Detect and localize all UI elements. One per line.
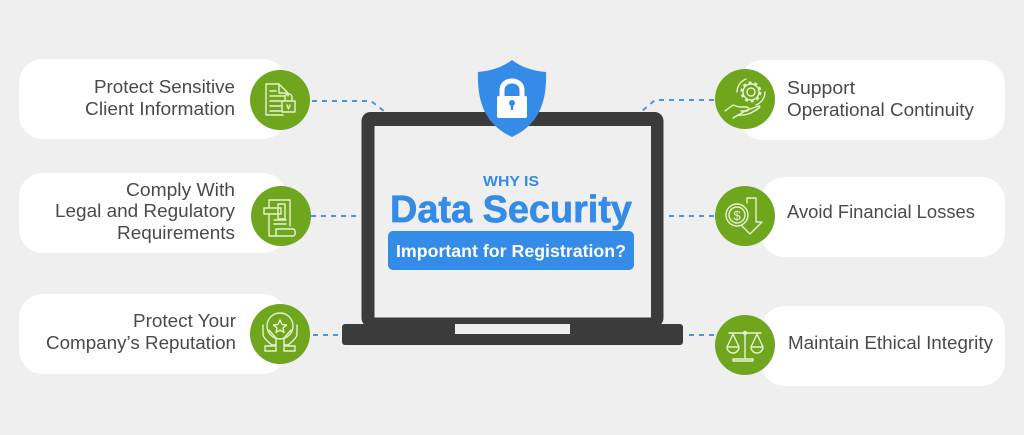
icon: balance scales bbox=[715, 315, 775, 375]
connector: bottom left bbox=[313, 334, 341, 336]
panel: comply with legal: Requirements bbox=[117, 223, 235, 243]
icon: shield with padlock bbox=[478, 60, 546, 137]
heading banner bbox=[388, 231, 634, 270]
heading: data security: Data Security bbox=[390, 189, 632, 231]
connector: top left bbox=[312, 101, 384, 111]
connector: middle right bbox=[664, 215, 714, 217]
panel: protect sensitive client information bbox=[19, 59, 287, 139]
panel: support operational continuity: Operational Continuity bbox=[787, 100, 974, 120]
laptop bbox=[342, 112, 683, 345]
icon: hand with gear bbox=[715, 69, 775, 129]
heading banner: Important for Registration? bbox=[396, 241, 626, 261]
icon: dollar coin with down arrow bbox=[715, 186, 775, 246]
panel: maintain ethical integrity bbox=[761, 306, 1005, 386]
icon: dollar coin with down arrow: $ bbox=[733, 208, 741, 223]
panel: protect sensitive client information: Client Information bbox=[85, 99, 235, 119]
panel: comply with legal: Comply With bbox=[126, 180, 235, 200]
icon: legal scroll with gavel bbox=[251, 186, 311, 246]
panel: comply with legal: Legal and Regulatory bbox=[55, 201, 235, 221]
panel: protect reputation bbox=[19, 294, 287, 374]
heading bbox=[388, 174, 634, 270]
panel: support operational continuity: Support bbox=[787, 78, 855, 98]
connector: middle left bbox=[311, 215, 361, 217]
panel: support operational continuity bbox=[739, 60, 1005, 140]
icon: document with lock bbox=[250, 70, 310, 130]
heading: why is: WHY IS bbox=[483, 174, 539, 190]
icon: hands holding star bbox=[250, 304, 310, 364]
connector: bottom right bbox=[684, 334, 714, 336]
connector: top right bbox=[641, 100, 714, 112]
panel: protect reputation: Protect Your bbox=[133, 311, 236, 331]
panel: avoid financial losses bbox=[761, 177, 1005, 257]
panel: protect sensitive client information: Protect Sensitive bbox=[94, 77, 235, 97]
panel: comply with legal bbox=[19, 173, 287, 253]
panel: protect reputation: Company’s Reputation bbox=[46, 333, 236, 353]
panel: maintain ethical integrity: Maintain Ethical Integrity bbox=[788, 333, 993, 353]
panel: avoid financial losses: Avoid Financial Losses bbox=[787, 202, 975, 222]
